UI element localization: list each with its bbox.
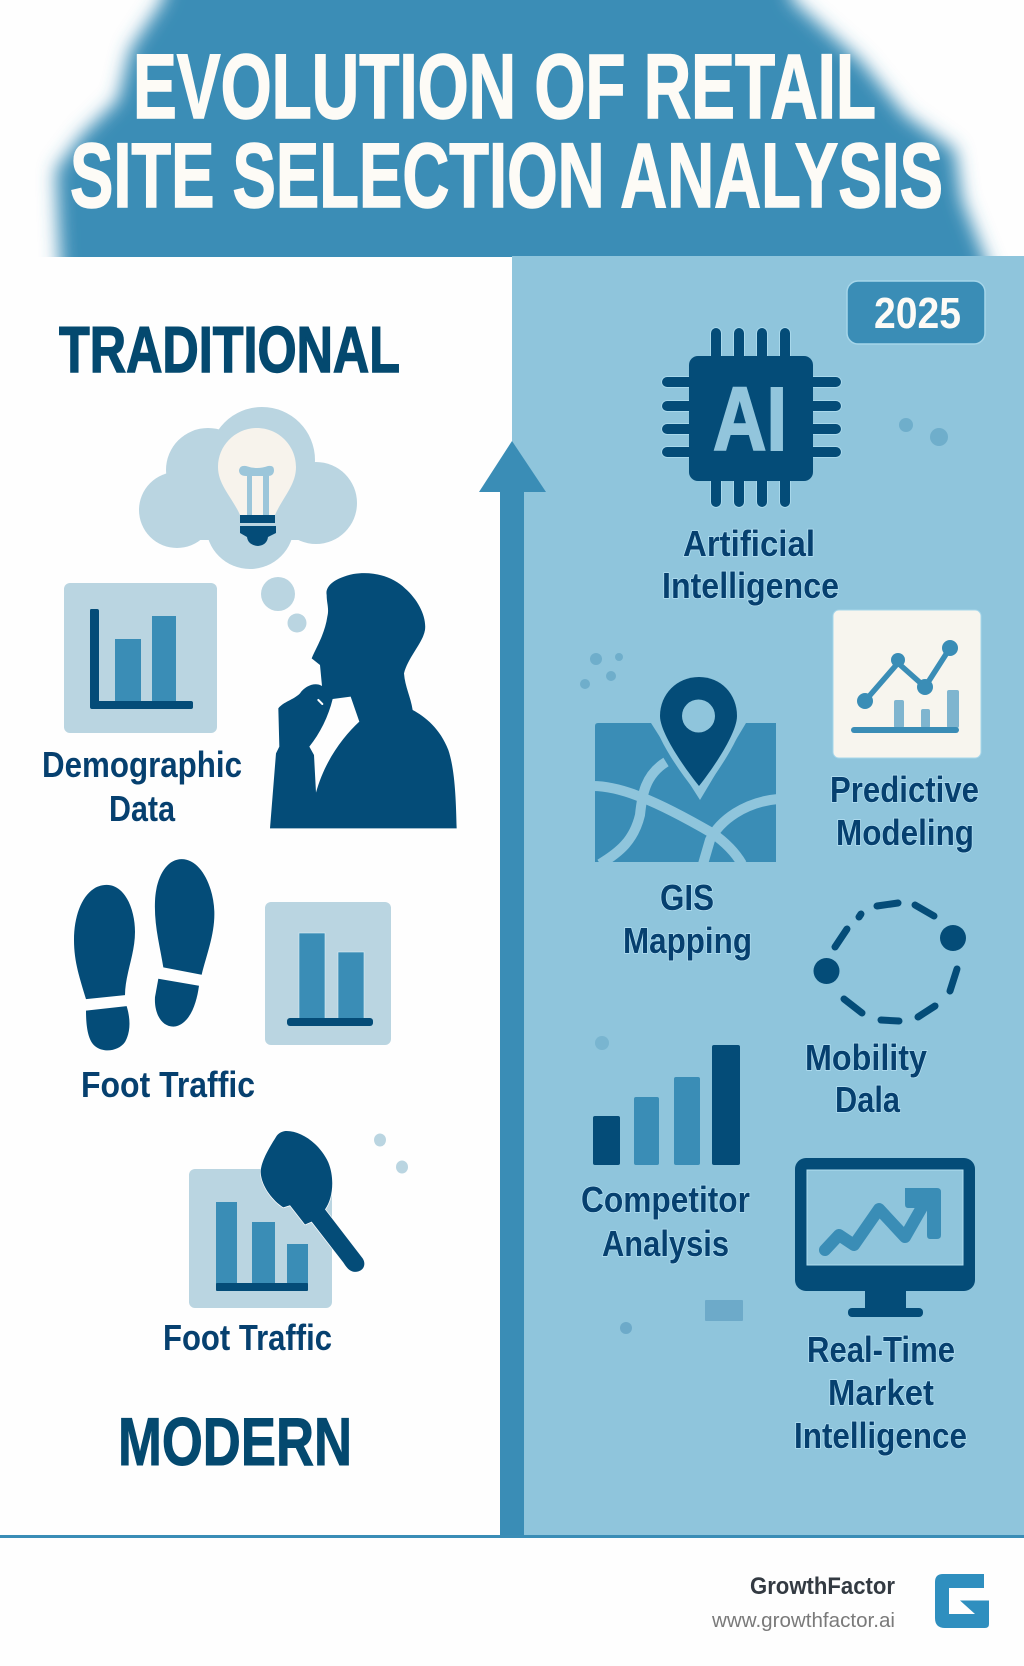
chart: competitor bars	[593, 1045, 740, 1165]
icon: thought cloud with bulb	[139, 407, 357, 632]
label: GIS mapping	[623, 877, 752, 961]
label: foot traffic: Foot Traffic	[81, 1064, 255, 1105]
icon: thinking person silhouette	[270, 573, 457, 828]
label: artificial intelligence: Intelligence	[662, 565, 839, 606]
badge: 2025	[847, 281, 985, 344]
label: mobility data	[805, 1037, 927, 1120]
label: foot traffic second: Foot Traffic	[163, 1317, 332, 1358]
icon: footprints	[74, 859, 214, 1050]
decorative dots near map	[580, 653, 623, 689]
label: real-time market intelligence	[794, 1329, 967, 1456]
label: predictive modeling	[830, 769, 979, 853]
label: real-time market intelligence: Real-Time	[807, 1329, 955, 1370]
label: predictive modeling: Predictive	[830, 769, 979, 810]
header banner	[41, 0, 1001, 257]
footer rule	[0, 1535, 1024, 1538]
icon: foot traffic bar tile	[265, 902, 391, 1045]
icon: AI chip: AI	[713, 370, 787, 470]
label: demographic data	[42, 744, 242, 829]
decorative block and blob	[620, 1300, 743, 1334]
label: real-time market intelligence: Intelligence	[794, 1415, 967, 1456]
icon: GIS map with pin	[593, 677, 778, 864]
panel: modern right side	[512, 256, 1024, 1536]
label: predictive modeling: Modeling	[836, 812, 974, 853]
decorative dots near magnifier	[374, 1134, 408, 1174]
footer brand text: www.growthfactor.ai	[711, 1610, 895, 1632]
footer brand text	[711, 1573, 895, 1632]
heading: traditional: TRADITIONAL	[59, 313, 400, 386]
decorative crescent	[595, 1036, 609, 1050]
label: artificial intelligence: Artificial	[683, 523, 815, 564]
label: competitor analysis: Competitor	[581, 1179, 750, 1220]
arrow: upward timeline	[479, 441, 546, 1537]
icon: monitor with trend	[795, 1158, 975, 1317]
footer brand text: GrowthFactor	[750, 1573, 895, 1600]
icon: magnified bar chart tile	[189, 1131, 364, 1308]
decorative dots near chip	[899, 418, 948, 446]
label: GIS mapping: GIS	[660, 877, 714, 918]
icon: mobility ring	[814, 903, 966, 1021]
label: GIS mapping: Mapping	[623, 920, 752, 961]
label: competitor analysis: Analysis	[602, 1223, 729, 1264]
label: mobility data: Dala	[835, 1079, 901, 1120]
label: artificial intelligence	[662, 523, 839, 606]
label: real-time market intelligence: Market	[828, 1372, 934, 1413]
label: competitor analysis	[581, 1179, 750, 1264]
icon: predictive modeling tile	[833, 610, 981, 758]
label: demographic data: Data	[109, 788, 176, 829]
label: demographic data: Demographic	[42, 744, 242, 785]
icon: demographic bar chart tile	[64, 583, 217, 733]
badge: 2025: 2025	[874, 289, 961, 338]
title	[70, 36, 943, 227]
icon: GrowthFactor logo	[935, 1574, 989, 1628]
heading: modern: MODERN	[118, 1404, 352, 1480]
label: mobility data: Mobility	[805, 1037, 927, 1078]
icon: AI chip	[662, 328, 841, 507]
